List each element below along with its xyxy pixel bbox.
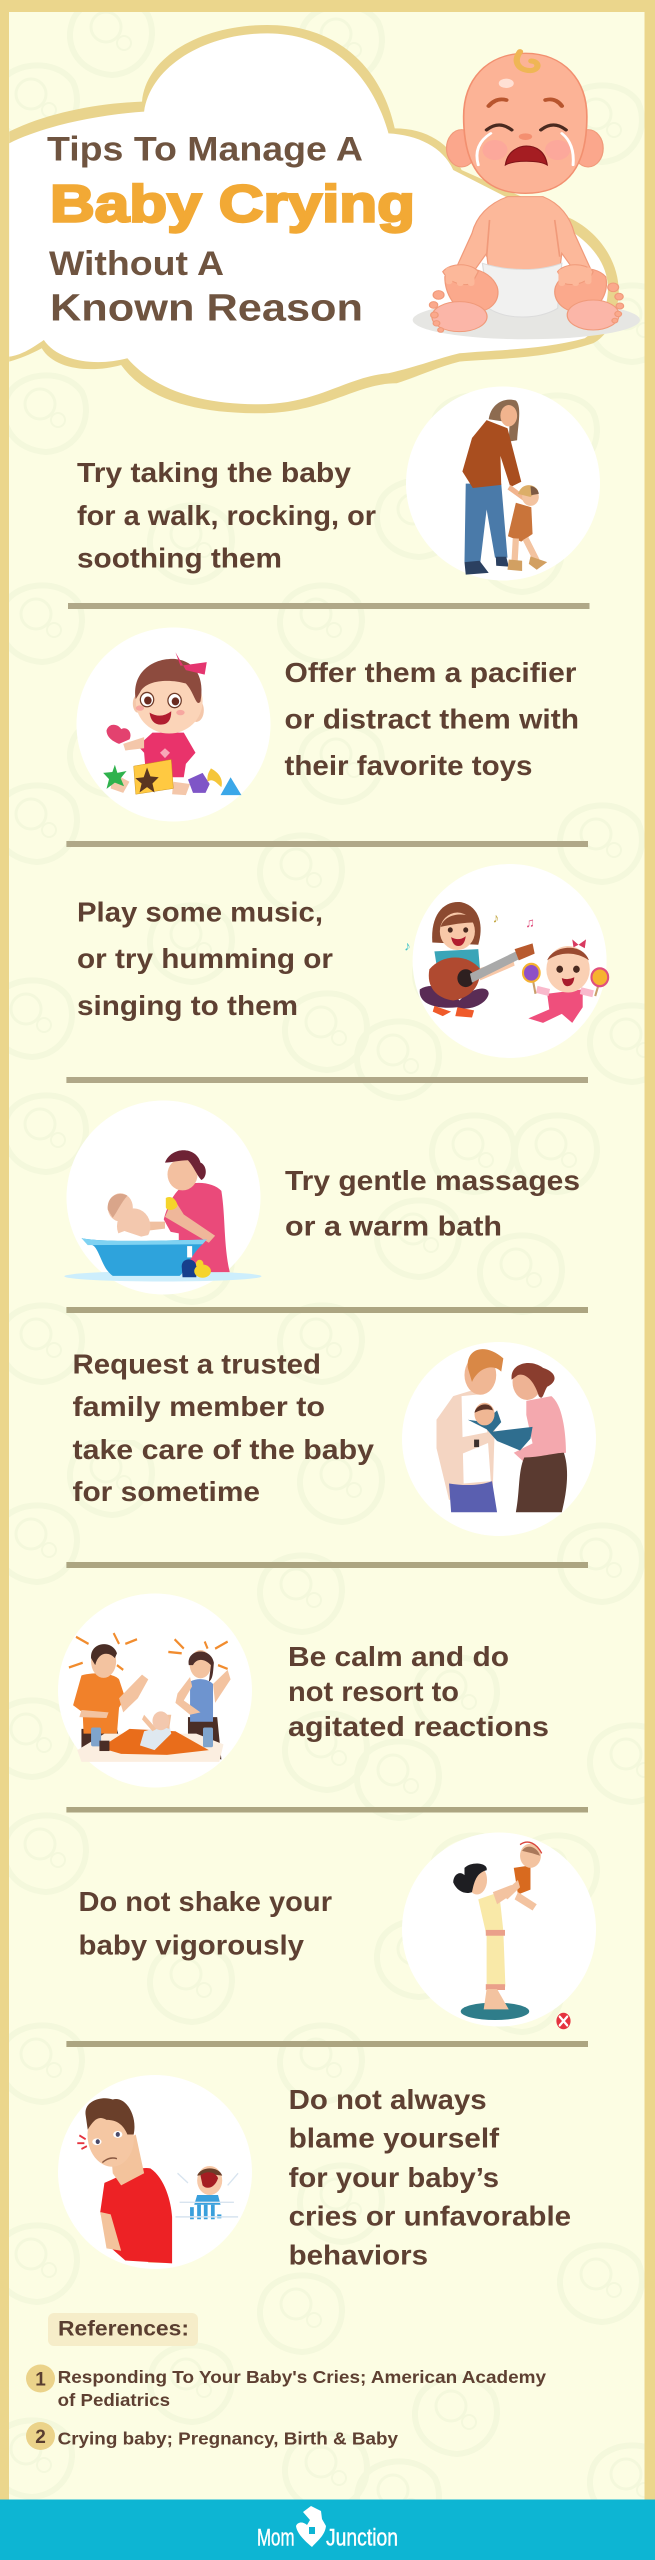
tip 1 text	[77, 457, 376, 574]
MomJunction logo	[257, 2506, 398, 2552]
tip 5 circle	[402, 1342, 596, 1536]
title text: Known Reason	[50, 288, 363, 330]
tip 4 circle	[66, 1100, 260, 1294]
icon: baby with toys	[103, 652, 241, 795]
tip 1 text: Try taking the baby	[77, 457, 351, 488]
icon: mother with guitar and baby: ♪	[493, 910, 499, 925]
icon: mother with guitar and baby: ♪	[404, 938, 411, 954]
diaper	[482, 263, 562, 317]
tip 5 text	[72, 1348, 374, 1507]
tip 6 text: agitated reactions	[288, 1711, 549, 1742]
icon: mother with guitar and baby: ♫	[525, 914, 535, 930]
tip 4 text: or a warm bath	[285, 1211, 502, 1242]
tip 8 text: for your baby’s	[289, 2162, 499, 2193]
tip 7 text: Do not shake your	[78, 1886, 332, 1917]
head	[464, 53, 587, 193]
title text: Without A	[49, 245, 224, 283]
icon: parents handing over baby	[436, 1349, 567, 1512]
footer bar	[0, 2500, 655, 2560]
title cloud	[9, 25, 619, 413]
reference 1	[26, 2364, 546, 2410]
tip 6 circle	[58, 1594, 252, 1788]
title text: Tips To Manage A	[47, 131, 363, 169]
tip 8 text: Do not always	[289, 2084, 487, 2115]
MomJunction logo: Mom	[257, 2524, 294, 2552]
title text	[47, 131, 415, 330]
references heading	[48, 2313, 198, 2346]
tip 5 text: for sometime	[72, 1476, 260, 1507]
divider 2	[66, 841, 588, 847]
tip 3 circle	[413, 864, 607, 1058]
tip 5 text: take care of the baby	[72, 1434, 374, 1465]
tip 3 text: singing to them	[77, 990, 298, 1021]
tip 7 text: baby vigorously	[78, 1930, 304, 1961]
legs and feet	[429, 265, 624, 332]
tip 3 text: Play some music,	[77, 896, 323, 928]
tip 5 text: Request a trusted	[72, 1348, 321, 1380]
icon: woman walking baby	[462, 400, 547, 575]
ears	[447, 130, 477, 167]
tip 6 text	[288, 1641, 549, 1742]
divider 7	[66, 2041, 588, 2047]
lightning marks	[69, 1633, 228, 1670]
reference 1: of Pediatrics	[58, 2390, 170, 2410]
MomJunction logo: Junction	[326, 2524, 398, 2552]
reference 2: 2	[35, 2427, 46, 2448]
tip 4 text: Try gentle massages	[285, 1165, 580, 1196]
reference 2: Crying baby; Pregnancy, Birth & Baby	[58, 2429, 398, 2449]
tip 2 text: or distract them with	[284, 704, 579, 735]
icon: crying baby	[413, 52, 640, 339]
tip 8 text: cries or unfavorable	[289, 2201, 571, 2232]
icon: sad father and crying baby	[77, 2098, 238, 2263]
icon: woman shaking baby	[453, 1842, 571, 2029]
references heading: References:	[58, 2318, 189, 2341]
tip 3 text: or try humming or	[77, 943, 333, 974]
tip 2 circle	[76, 628, 270, 822]
tip 7 text	[78, 1886, 332, 1961]
icon: mother with guitar and baby	[404, 902, 608, 1023]
tip 1 text: soothing them	[77, 542, 282, 574]
divider 1	[68, 603, 590, 609]
reference 1: 1	[35, 2370, 46, 2390]
tip 3 text	[77, 896, 333, 1021]
tip 8 text	[289, 2084, 571, 2270]
tip 8 circle	[58, 2075, 252, 2269]
tip 1 circle	[406, 386, 600, 580]
tip 2 text	[284, 657, 579, 781]
tip 4 text	[285, 1165, 580, 1242]
tip 5 text: family member to	[72, 1391, 325, 1422]
hair curl	[517, 52, 537, 71]
reference 2	[26, 2422, 398, 2450]
tip 2 text: their favorite toys	[284, 750, 532, 781]
chest lines	[487, 220, 560, 257]
tip 6 text: not resort to	[288, 1676, 459, 1707]
divider 5	[66, 1562, 588, 1568]
tip 7 circle	[402, 1832, 596, 2026]
divider 3	[66, 1077, 588, 1083]
icon: baby bath	[64, 1150, 261, 1282]
tip 8 text: blame yourself	[289, 2122, 500, 2154]
reference 1: Responding To Your Baby's Cries; American Academy	[58, 2367, 546, 2387]
tip 6 text: Be calm and do	[288, 1641, 509, 1672]
divider 6	[66, 1807, 588, 1812]
tip 8 text: behaviors	[289, 2239, 428, 2270]
tip 2 text: Offer them a pacifier	[284, 657, 577, 688]
title text: Baby Crying	[50, 176, 415, 234]
baby's hands	[449, 270, 588, 283]
tip 1 text: for a walk, rocking, or	[77, 500, 376, 531]
prohibited mark	[556, 2013, 571, 2029]
crying face	[477, 99, 573, 165]
baby torso	[455, 197, 591, 277]
icon: agitated parents	[69, 1633, 231, 1762]
divider 4	[66, 1307, 588, 1313]
